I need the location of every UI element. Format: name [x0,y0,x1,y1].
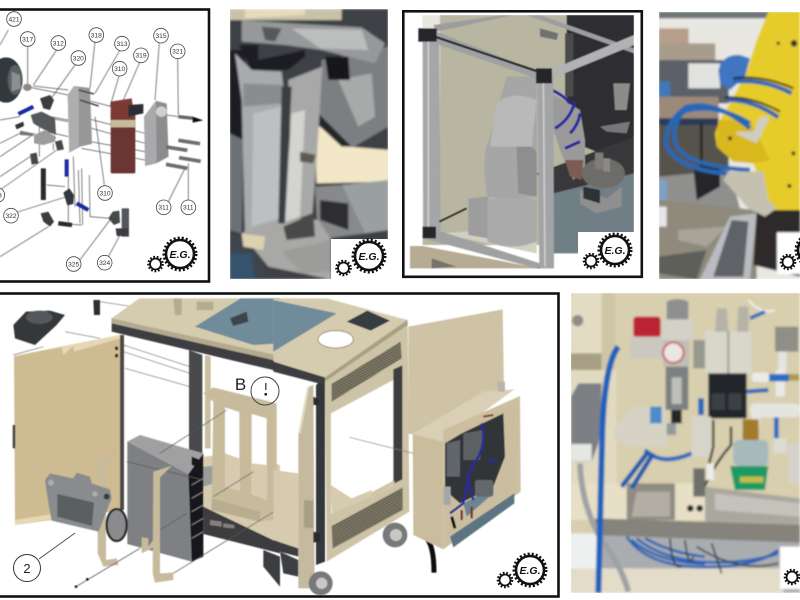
fork bracket right [153,466,173,583]
grey cable [580,463,628,592]
blue cables in box [450,423,497,513]
logo box [578,232,634,269]
filter regulator [633,317,661,337]
teach pendant [45,473,112,532]
robot arm [468,197,488,238]
logo: E.G. gears: E.G. [519,565,541,577]
part numbers: 315 [155,33,167,40]
part numbers [0,12,196,271]
panel: photo of pneumatic control panel [570,293,800,593]
gripper [723,172,777,217]
part numbers: 321 [172,49,184,56]
right side frame [325,319,409,562]
part numbers: 319 [135,53,147,60]
black tube [40,168,47,201]
panel: photo of aluminium gripper fingers [230,9,388,279]
bolts [178,117,193,118]
part numbers: 310 [99,190,111,197]
lubricator [743,419,759,440]
enclosure and robot arm render [410,15,634,269]
shelf continuation [273,470,298,548]
U frame B [203,387,277,522]
blue and dark harness [627,537,778,567]
cable behind pendant [107,509,127,541]
tabletop continuation [273,298,407,377]
logo: E.G. gears: E.G. [604,245,626,257]
cross bar [595,518,800,543]
fork bracket left [98,451,119,567]
chuck [0,57,23,103]
part numbers: 421 [8,16,20,23]
part numbers: 310 [114,66,126,73]
rotary table [580,187,622,213]
panel: exploded cart assembly drawing [0,294,558,596]
logo: E.G. gears [781,234,800,269]
blue hoses [718,55,750,90]
trays [627,483,675,520]
right-hand fittings [775,327,798,352]
logo: E.G. gears [584,234,631,268]
shelf floor [203,453,280,543]
logo: E.G. gears: E.G. [169,249,191,261]
right door [408,309,504,434]
logo box [331,239,388,279]
robot body [715,12,800,210]
panel: exploded gripper parts diagram [0,10,209,282]
battery box [127,435,203,474]
part numbers: 322 [5,213,17,220]
logo: E.G. gears [148,238,196,271]
logo box [780,547,800,589]
front frame [435,31,536,78]
control box [413,389,514,442]
white module [613,407,667,447]
part numbers: 324 [99,260,111,267]
valve manifold [693,340,707,368]
power cable [427,538,434,573]
lower bay [570,533,800,593]
part numbers: 320 [73,55,84,62]
logo box [777,232,800,274]
assembly line to box [349,437,413,453]
plate 318 [68,86,92,153]
part numbers: 317 [22,36,34,43]
callout: B with detail circle: B [235,375,246,394]
small fittings [40,95,54,110]
tabletop [112,298,280,357]
logo: E.G. gears [498,554,546,587]
part numbers: 313 [116,41,128,48]
part numbers: 311 [183,205,194,212]
plate 315 [144,101,169,166]
cart drawing [13,298,521,595]
small valve and black cables [692,417,711,457]
part numbers: 311 [158,205,169,212]
logo: E.G. gears [336,240,385,275]
screw line [76,548,140,587]
part numbers: 318 [91,32,102,39]
callout: B with detail circle [235,375,279,405]
part numbers: 325 [68,261,80,268]
rear frame [433,15,634,53]
panel: robot enclosure render [403,11,642,277]
blue tubing [18,107,88,210]
callout: part number 2: 2 [23,561,31,576]
wheels [383,523,407,547]
logo: E.G. gears: E.G. [358,251,380,263]
callout: part number 2 [14,533,75,582]
red cylinder 319 [111,112,135,173]
elbow fittings [63,188,74,205]
exploded parts drawing [0,12,203,271]
main blue tube [598,347,618,593]
assembly lines [13,302,190,387]
chuck block [13,311,65,345]
panel: photo of yellow robot with blue hoses [659,12,800,279]
rear post [189,350,202,453]
logo: E.G. gears [785,570,799,584]
part numbers: 312 [53,40,64,47]
connector [571,383,602,462]
front door [298,385,315,588]
left door [14,335,124,525]
